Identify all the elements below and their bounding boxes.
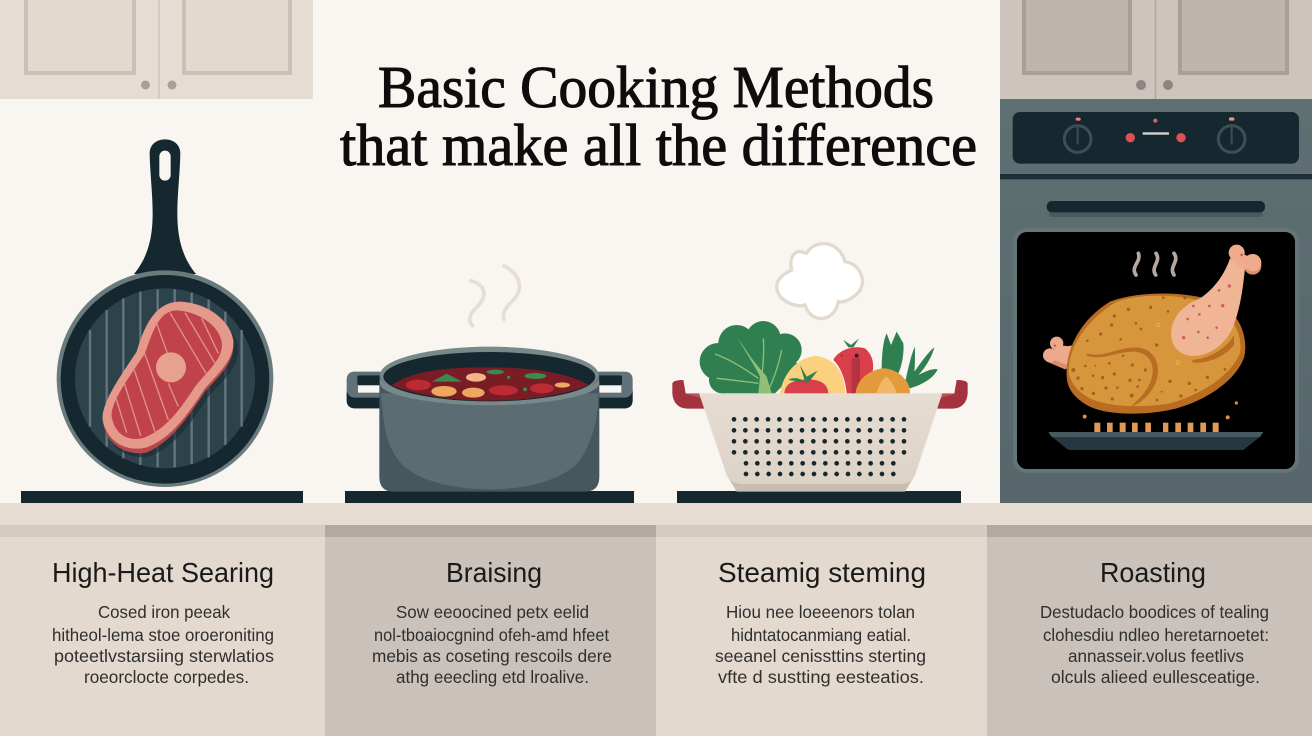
panel: high-heat searing: roeorclocte corpedes.	[84, 667, 249, 687]
panel: roasting: Roasting	[1100, 557, 1206, 588]
panel: braising: mebis as coseting rescoils dere	[372, 646, 612, 666]
panel: high-heat searing: High-Heat Searing	[52, 557, 274, 588]
icon: skillet with steak	[57, 139, 273, 487]
panel: steaming	[656, 537, 987, 736]
panel: steaming: hidntatocanmiang eatial.	[731, 625, 911, 645]
panel: high-heat searing: Cosed iron peeak	[98, 602, 230, 622]
steam	[470, 266, 519, 326]
panel: steaming: seeanel cenissttins sterting	[715, 646, 926, 666]
panel: roasting	[987, 537, 1312, 736]
panel: braising: nol-tboaiocgnind ofeh-amd hfeet	[374, 625, 609, 645]
pot handles	[347, 372, 633, 408]
oven	[1000, 99, 1312, 504]
panel: braising: athg eeecling etd lroalive.	[396, 667, 589, 687]
panel: braising	[325, 537, 656, 736]
colander handles	[672, 380, 968, 409]
title	[340, 54, 977, 178]
panel: roasting: Destudaclo boodices of tealing	[1040, 602, 1269, 622]
icon: colander with vegetables	[672, 321, 968, 492]
oven control panel	[1000, 112, 1312, 217]
panel: roasting: clohesdiu ndleo heretarnoetet:	[1043, 625, 1269, 645]
panel: braising: Sow eeoocined petx eelid	[396, 602, 589, 622]
panel: roasting: olculs alieed eullesceatige.	[1051, 667, 1260, 687]
panel: steaming: vfte d sustting eesteatios.	[718, 667, 924, 687]
stove bar: searing	[21, 491, 303, 503]
panel: high-heat searing	[0, 537, 325, 736]
stove bar: steaming	[677, 491, 961, 503]
panel: steaming: Steamig steming	[718, 557, 926, 588]
title: Basic Cooking Methods	[378, 54, 934, 120]
panel: high-heat searing: poteetlvstarsiing sterwlatios	[54, 646, 274, 666]
stove bar: braising	[345, 491, 634, 503]
steak	[103, 302, 238, 457]
icon: steam cloud	[777, 244, 862, 318]
icon: braising pot	[347, 266, 633, 492]
stew ingredients	[406, 370, 570, 398]
colander holes	[734, 419, 907, 474]
upper cabinet left	[0, 0, 313, 99]
panel: braising: Braising	[446, 557, 542, 588]
panel: steaming: Hiou nee loeeenors tolan	[726, 602, 915, 622]
upper cabinet right	[1000, 0, 1312, 99]
oven window	[1015, 230, 1297, 471]
counter	[0, 503, 1312, 537]
vegetables	[700, 321, 938, 393]
panel: roasting: annasseir.volus feetlivs	[1068, 646, 1244, 666]
panel: high-heat searing: hitheol-lema stoe oroeroniting	[52, 625, 274, 645]
title: that make all the difference	[340, 112, 977, 178]
roast chicken	[1043, 245, 1263, 450]
